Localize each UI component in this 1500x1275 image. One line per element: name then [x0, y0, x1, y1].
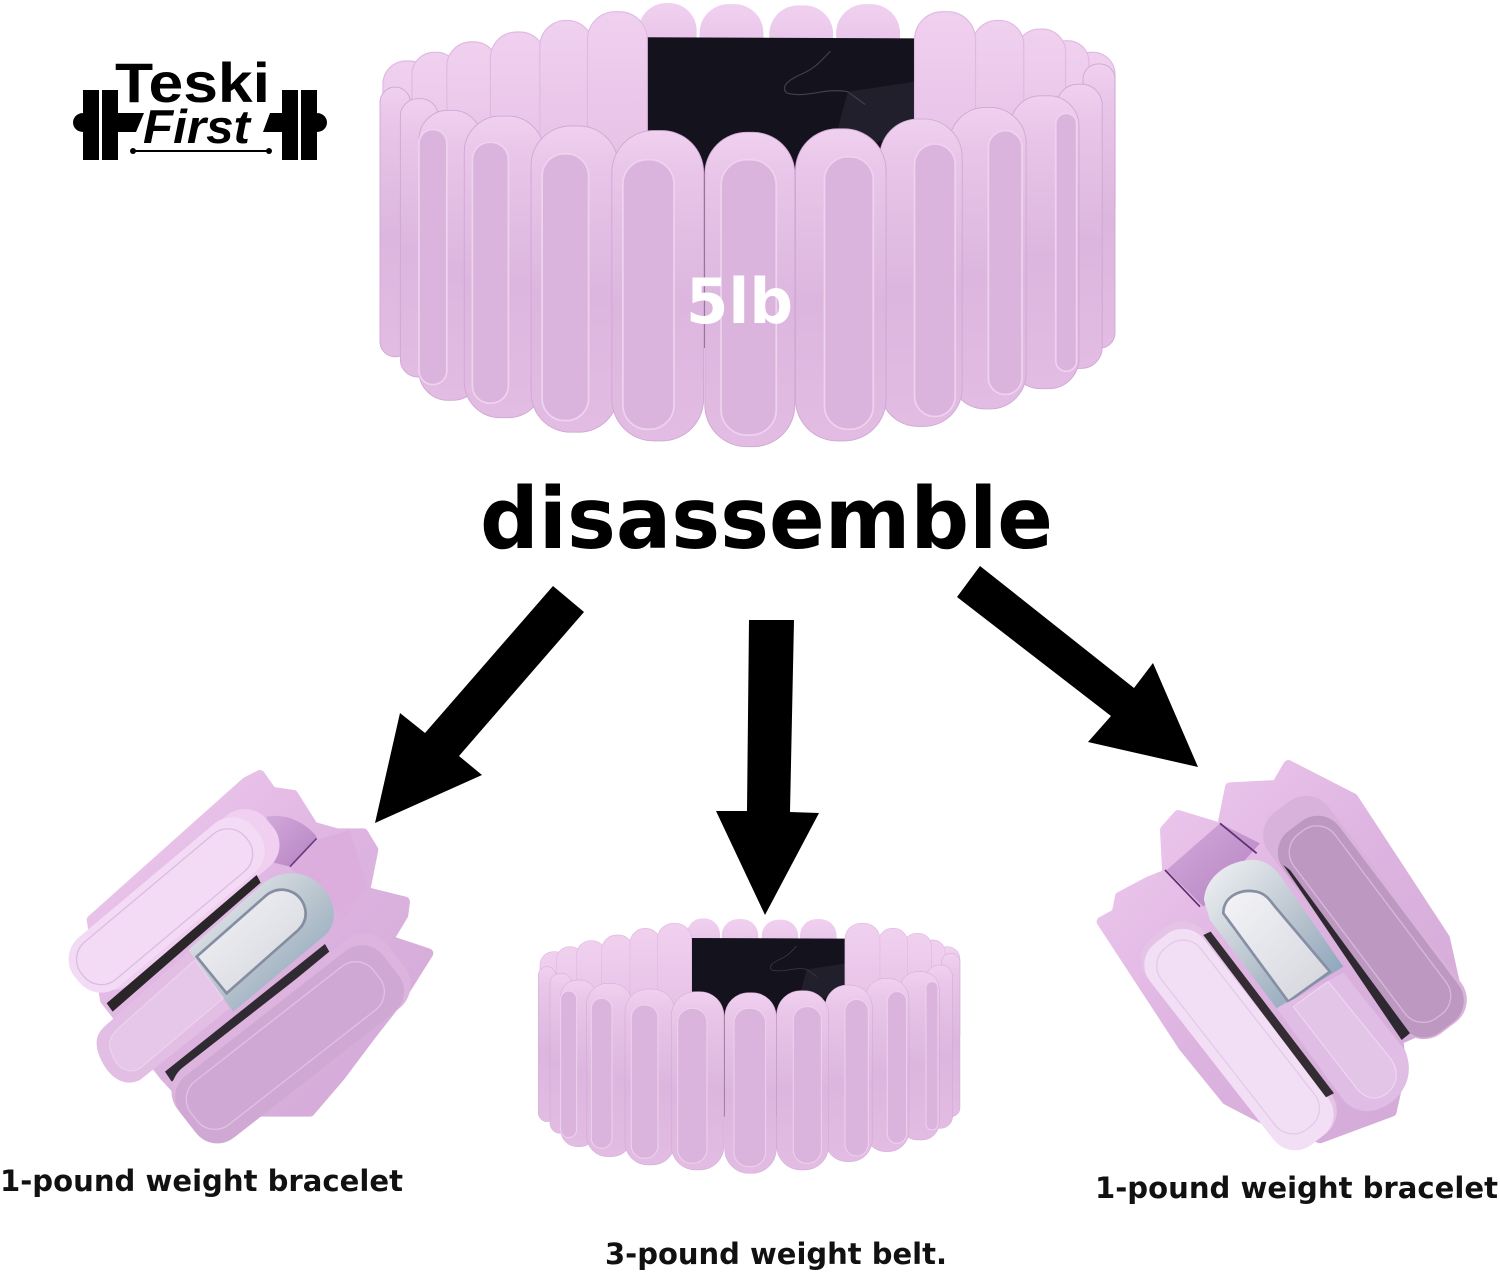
underline with dots	[130, 148, 272, 154]
silver clasp	[188, 873, 334, 1012]
right 1-pound bracelet	[1102, 765, 1478, 1161]
top pill	[57, 796, 291, 1008]
label: right bracelet: 1-pound weight bracelet	[1095, 1171, 1498, 1205]
middle 3-pound belt	[538, 918, 960, 1173]
main weight belt, 5lb	[380, 3, 1115, 447]
dumbbell left	[73, 90, 144, 160]
velcro strap right	[1283, 865, 1410, 1040]
arrow to right bracelet	[957, 566, 1198, 767]
arrow to left bracelet	[375, 586, 584, 823]
silver clasp	[1204, 860, 1343, 1008]
bottom pill	[159, 922, 423, 1154]
pink lower half of clasp pill	[97, 952, 230, 1083]
left 1-pound bracelet	[57, 775, 428, 1154]
velcro strap lower	[165, 944, 329, 1082]
back segments	[1102, 765, 1455, 1138]
arrow to belt	[716, 620, 819, 915]
heading: disassemble: disassemble	[480, 470, 1053, 569]
velcro strap left	[1203, 932, 1334, 1097]
back segments	[92, 775, 428, 1112]
lower-left pill	[1129, 910, 1348, 1161]
top pill	[1252, 784, 1478, 1051]
label: left bracelet: 1-pound weight bracelet	[0, 1164, 403, 1198]
Teski wordmark: Teski	[115, 51, 270, 114]
dumbbell right	[263, 90, 327, 160]
velcro strap upper	[107, 875, 261, 1012]
pink lower half of clasp pill	[1277, 973, 1409, 1111]
label: middle belt: 3-pound weight belt.	[605, 1237, 947, 1271]
logo: Teski First dumbbell	[73, 51, 327, 160]
First wordmark: First	[143, 100, 252, 153]
weight label: 5lb: 5lb	[686, 265, 793, 338]
